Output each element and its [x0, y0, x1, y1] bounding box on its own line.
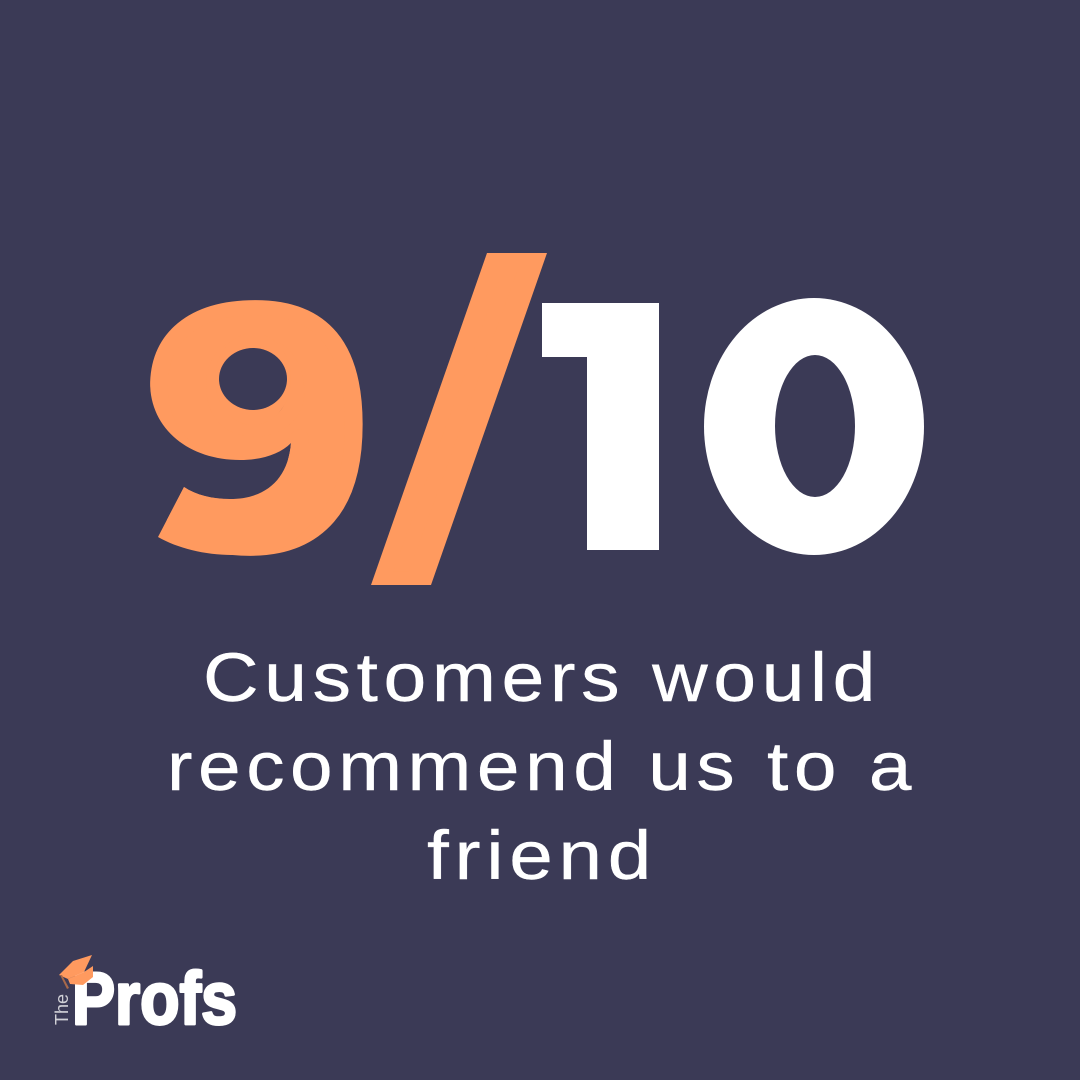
slash: /: [374, 179, 539, 671]
caption line 1: Customers would: [203, 639, 881, 716]
numeral 0: 0: [699, 237, 930, 617]
logo: The Profs: [52, 955, 237, 1040]
statistic: 9/10: [150, 253, 924, 585]
caption: [167, 639, 917, 894]
numeral 1: 1: [510, 237, 718, 617]
logo wordmark Profs: Profs: [72, 957, 237, 1040]
numeral 0: [704, 298, 924, 555]
numeral 9: 9: [145, 237, 369, 617]
icon: graduation cap: [59, 955, 93, 989]
caption line 3: friend: [427, 817, 657, 894]
numeral 1: [542, 303, 659, 550]
caption line 2: recommend us to a: [167, 728, 917, 805]
logo word The: The: [52, 994, 72, 1025]
